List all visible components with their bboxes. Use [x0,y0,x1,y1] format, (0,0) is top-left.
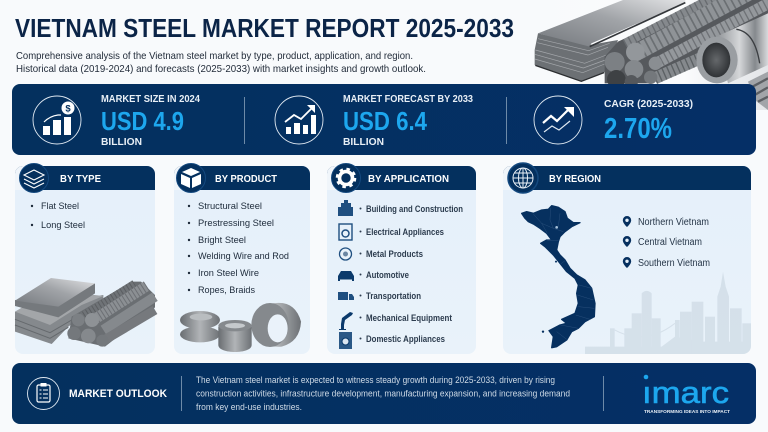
icon: truck [338,292,354,300]
panel: by application [327,164,476,354]
icon: building [338,200,353,216]
list [188,201,289,296]
list: Building and Construction [366,204,463,214]
icon: domestic appliance [339,332,352,349]
icon: layers [20,164,48,192]
logo: imarc: ımarc [642,375,729,410]
heading: BY APPLICATION [368,174,449,185]
list: Flat Steel [41,201,79,212]
stat: market size: BILLION [101,136,142,148]
stat: market forecast: BILLION [343,136,384,148]
hero image: steel products [528,0,768,110]
legend: regions: Central Vietnam [638,237,702,248]
list: Domestic Appliances [366,334,445,344]
image: plates and rods [15,278,155,347]
icon: robot arm [339,312,353,330]
logo: imarc: TRANSFORMING IDEAS INTO IMPACT [644,409,730,415]
list: Iron Steel Wire [198,268,259,279]
stat: market forecast [275,93,473,148]
icon: electrical appliance [339,224,352,240]
list: Bright Steel [198,235,246,246]
text block: construction activities, infrastructure development, manufacturing expansion, and increasing demand [196,388,570,398]
icon: pin [623,257,631,268]
list: Transportation [366,291,421,301]
stat: CAGR: 2.70% [604,113,672,145]
list: Electrical Appliances [366,227,444,237]
list: Prestressing Steel [198,218,274,229]
legend: regions: Northern Vietnam [638,217,709,228]
panel: market outlook [12,363,756,424]
icon: bars with dollar coin: $ [65,104,71,114]
list: Automotive [366,270,409,280]
icon: globe [508,163,538,193]
icon: metal products gear [340,248,352,260]
heading: BY PRODUCT [215,174,277,185]
list: Ropes, Braids [198,285,255,296]
icon: car [338,271,354,281]
stat: market size: MARKET SIZE IN 2024 [101,93,200,105]
icon: clipboard [28,378,60,410]
legend: regions: Southern Vietnam [638,258,710,269]
stat: market size: USD 4.9 [101,106,184,136]
list [360,204,463,344]
icon: box [176,164,206,192]
panel: by product [174,164,310,354]
list: Mechanical Equipment [366,313,452,323]
icon: pin [623,236,631,247]
skyline [585,272,751,355]
text block: from key end-use industries. [196,402,302,412]
panel: by region [503,163,751,355]
legend: regions [623,216,710,269]
text block [196,375,570,412]
heading: BY TYPE [60,174,101,185]
stats band [12,84,756,155]
heading: MARKET OUTLOOK [69,388,167,400]
list: Welding Wire and Rod [198,251,289,262]
stat: market forecast: USD 6.4 [343,106,427,136]
image: wire coils [180,303,301,352]
subtitle [16,50,426,75]
list: Long Steel [41,220,85,231]
stat: market size [33,93,200,148]
stat: market forecast: MARKET FORECAST BY 2033 [343,93,473,105]
icon: pin [623,216,631,227]
subtitle: Comprehensive analysis of the Vietnam steel market by type, product, application, and region. [16,50,413,62]
list: Metal Products [366,249,423,259]
list [31,201,85,231]
panel: by type [15,164,155,354]
icon: gear [332,164,360,192]
subtitle: Historical data (2019-2024) and forecasts (2025-2033) with market insights and growth outlook. [16,63,426,75]
heading: BY REGION [549,174,601,185]
title: VIETNAM STEEL MARKET REPORT 2025-2033 [15,13,514,43]
icon: growth bars with arrow [275,96,323,144]
list: Structural Steel [198,201,262,212]
stat: CAGR: CAGR (2025-2033) [604,98,693,110]
stat: CAGR [534,96,693,145]
icon: bars with dollar coin [33,96,81,144]
icon: trend lines [534,96,582,144]
text block: The Vietnam steel market is expected to witness steady growth during 2025-2033, driven by rising [196,375,555,385]
map: Vietnam [522,206,595,348]
